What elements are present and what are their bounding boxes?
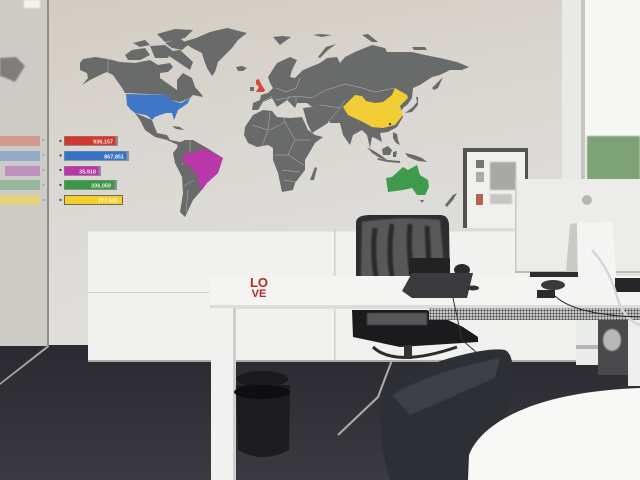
desk bbox=[210, 276, 640, 480]
bar: green: 336,059 bbox=[91, 184, 111, 190]
iceland bbox=[236, 66, 247, 71]
tasmania bbox=[420, 200, 424, 203]
arabia bbox=[303, 107, 330, 133]
greenland bbox=[183, 28, 247, 76]
desk phone bbox=[402, 258, 479, 352]
bar: red: 936,157 bbox=[93, 140, 113, 146]
japan bbox=[405, 97, 418, 113]
africa bbox=[244, 110, 323, 192]
country: China bbox=[343, 88, 408, 128]
wall background bbox=[0, 0, 640, 350]
office chair behind desk bbox=[338, 215, 478, 435]
new zealand bbox=[445, 193, 457, 207]
indonesia and philippines bbox=[367, 132, 427, 163]
round table bbox=[468, 388, 640, 480]
bar: blue: 867,851 bbox=[104, 154, 124, 160]
waste bin bbox=[234, 371, 290, 457]
computer monitor bbox=[515, 179, 640, 298]
red sculpture: LO bbox=[250, 275, 268, 290]
cables bbox=[592, 250, 640, 325]
bar: purple: 35,918 bbox=[79, 170, 96, 176]
country: UK bbox=[256, 79, 265, 92]
arctic eurasian islands bbox=[273, 34, 427, 58]
internal country borders bbox=[108, 59, 395, 212]
red sculpture: VE bbox=[252, 288, 266, 300]
red sculpture bbox=[250, 275, 268, 300]
white cabinets bbox=[88, 230, 576, 362]
keyboard and mouse bbox=[530, 272, 640, 298]
foreground chair bbox=[380, 349, 513, 480]
ireland bbox=[250, 87, 254, 91]
country: USA bbox=[126, 94, 190, 120]
floor carpet bbox=[0, 345, 640, 480]
north america bbox=[80, 57, 203, 102]
window and column bbox=[562, 0, 640, 365]
country: Brazil bbox=[182, 148, 223, 190]
world map bbox=[80, 28, 469, 217]
photo under desk bbox=[598, 320, 640, 386]
south america bbox=[173, 140, 223, 217]
madagascar bbox=[310, 167, 317, 180]
left mirrored panel bbox=[0, 0, 49, 385]
highlighted countries bbox=[126, 79, 429, 195]
kamchatka bbox=[432, 77, 443, 90]
caribbean bbox=[172, 126, 184, 130]
country: Australia bbox=[386, 165, 429, 195]
bar: yellow: 777,591 bbox=[98, 198, 118, 204]
legend bars bbox=[59, 136, 129, 205]
europe and asia bbox=[252, 45, 469, 148]
arctic islands bbox=[125, 29, 193, 70]
mexico and central america bbox=[135, 113, 180, 145]
mirrored legend bars bbox=[0, 136, 44, 205]
picture frame bbox=[463, 148, 528, 228]
